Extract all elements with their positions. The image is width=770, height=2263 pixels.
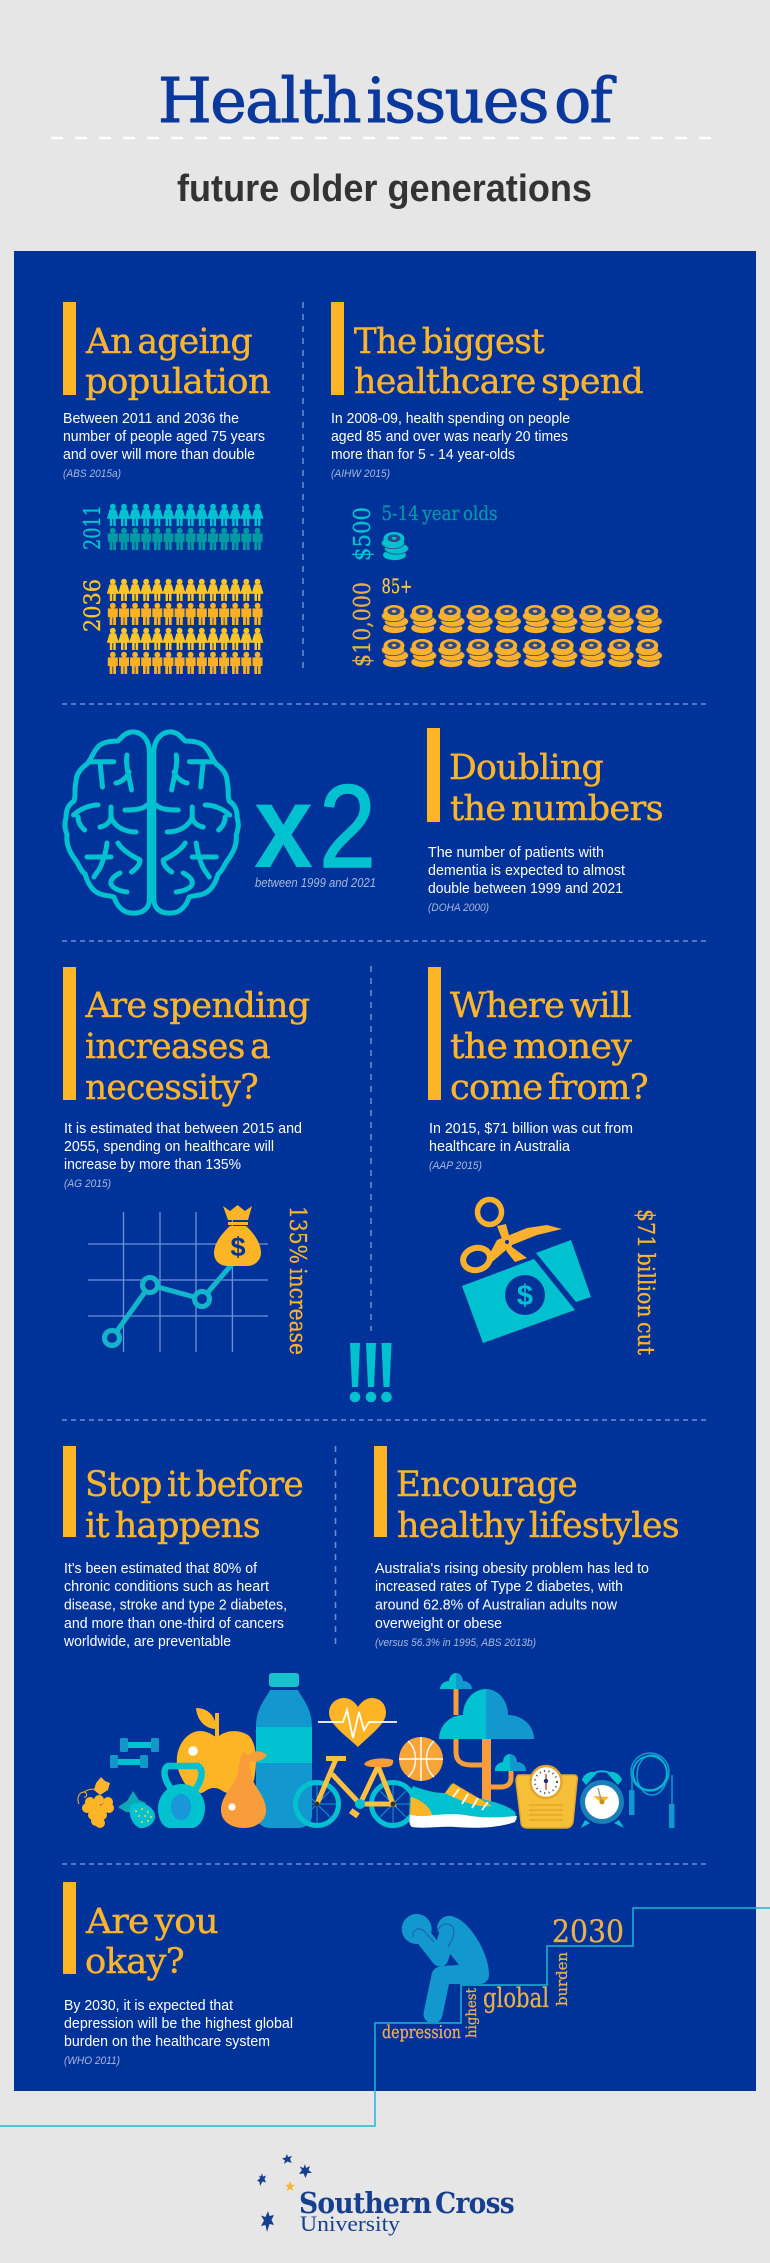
section: are spending increases a necessity <box>63 967 310 1190</box>
section: where will the money come from: the money <box>450 1027 632 1067</box>
stair words: depression <box>382 2022 461 2043</box>
section: encourage healthy lifestyles: (versus 56.3% in 1995, ABS 2013b) <box>375 1637 536 1649</box>
section: stop it before it happens: chronic conditions such as heart <box>64 1579 269 1595</box>
icon: water bottle <box>256 1673 312 1828</box>
section: stop it before it happens: it happens <box>85 1506 260 1546</box>
section: stop it before it happens: disease, stroke and type 2 diabetes, <box>64 1598 287 1614</box>
pictogram: 2011 population <box>81 504 264 550</box>
section: an ageing population: population <box>85 362 270 402</box>
section: stop it before it happens: and more than one-third of cancers <box>64 1616 284 1632</box>
logo: Southern Cross University <box>257 2154 514 2236</box>
stair words: 2030 <box>552 1914 624 1950</box>
section: are spending increases a necessity: increases a <box>85 1027 270 1067</box>
coins: $500 for 5-14 year olds: $500 <box>350 507 376 561</box>
section: an ageing population: An ageing <box>85 322 252 362</box>
section: are spending increases a necessity: It is estimated that between 2015 and <box>64 1121 302 1137</box>
section: encourage healthy lifestyles: Australia's rising obesity problem has led to <box>375 1561 649 1577</box>
section: doubling the numbers: Doubling <box>449 748 603 788</box>
section: are you okay: burden on the healthcare system <box>64 2034 270 2050</box>
icon: heart rate <box>318 1698 397 1747</box>
section: where will the money come from: Where will <box>450 986 631 1026</box>
x2 statistic: 2 <box>319 761 376 893</box>
section: where will the money come from: healthcare in Australia <box>429 1139 571 1155</box>
icon: exclamation marks <box>350 1343 392 1402</box>
pictogram: 2011 population: 2011 <box>81 505 106 550</box>
section: encourage healthy lifestyles: increased rates of Type 2 diabetes, with <box>375 1579 623 1595</box>
section: are spending increases a necessity: necessity? <box>85 1068 258 1108</box>
icon: money bag <box>214 1205 261 1266</box>
section: the biggest healthcare spend: (AIHW 2015) <box>331 468 390 480</box>
section: are you okay: By 2030, it is expected that <box>64 1998 233 2014</box>
section: the biggest healthcare spend <box>331 302 643 480</box>
section: stop it before it happens: worldwide, are preventable <box>63 1634 231 1650</box>
logo: Southern Cross University: Southern Cross <box>299 2186 514 2220</box>
section: stop it before it happens: It's been estimated that 80% of <box>64 1561 258 1577</box>
section: are spending increases a necessity: Are spending <box>84 986 310 1026</box>
pictogram: 2036 population: 2036 <box>81 579 106 632</box>
icon: pear <box>221 1751 267 1828</box>
section: where will the money come from: (AAP 2015) <box>429 1160 482 1172</box>
section: the biggest healthcare spend: The biggest <box>354 322 545 362</box>
icon: weighing scale <box>516 1766 577 1828</box>
coins: $10,000 for 85+: 85+ <box>382 574 412 598</box>
icon: money bag: $ <box>230 1232 246 1262</box>
icon: skipping rope <box>629 1753 674 1828</box>
section: the biggest healthcare spend: aged 85 and over was nearly 20 times <box>331 429 568 445</box>
section: stop it before it happens: Stop it before <box>85 1465 303 1505</box>
stair words <box>382 1914 624 2043</box>
section: are you okay: depression will be the highest global <box>64 2016 293 2032</box>
section: are spending increases a necessity: 2055, spending on healthcare will <box>64 1139 274 1155</box>
stair words: burden <box>553 1952 571 2006</box>
icon: scissors cutting money <box>461 1200 658 1356</box>
icon: kettlebell <box>158 1766 205 1828</box>
section: doubling the numbers <box>427 728 663 914</box>
section: doubling the numbers: the numbers <box>450 789 663 829</box>
logo: Southern Cross University: University <box>300 2211 400 2236</box>
section: doubling the numbers: The number of patients with <box>428 845 604 861</box>
section: stop it before it happens <box>63 1446 303 1650</box>
icon: alarm clock <box>580 1771 624 1828</box>
main blue panel <box>14 251 756 2091</box>
x2 statistic: x <box>254 761 313 893</box>
section: are you okay: Are you <box>85 1902 218 1942</box>
icon: apple <box>177 1708 256 1794</box>
title: Health issues of <box>158 64 617 137</box>
icon: scissors cutting money: $ <box>517 1280 533 1312</box>
chart: 135% increase <box>88 1205 310 1355</box>
icon: bicycle <box>296 1756 414 1826</box>
section: doubling the numbers: double between 1999 and 2021 <box>428 881 623 897</box>
section: an ageing population: Between 2011 and 2036 the <box>63 411 239 427</box>
coins: $500 for 5-14 year olds <box>350 501 498 561</box>
stair line <box>0 1908 770 2126</box>
icon: dumbbells <box>110 1738 159 1768</box>
section: an ageing population: (ABS 2015a) <box>63 468 121 480</box>
icon: trees <box>439 1673 534 1804</box>
icon: scissors cutting money: $71 billion cut <box>632 1209 658 1356</box>
healthy lifestyle illustration <box>78 1673 674 1828</box>
coins: $10,000 for 85+: $10,000 <box>350 582 376 667</box>
coins: $10,000 for 85+ <box>350 574 662 667</box>
section: encourage healthy lifestyles: overweight or obese <box>375 1616 502 1632</box>
section: are you okay: (WHO 2011) <box>64 2055 120 2067</box>
section: doubling the numbers: (DOHA 2000) <box>428 902 489 914</box>
x2 statistic <box>254 761 376 893</box>
section: encourage healthy lifestyles: Encourage <box>396 1465 577 1505</box>
section: encourage healthy lifestyles: around 62.8% of Australian adults now <box>375 1598 618 1614</box>
section: are you okay: okay? <box>85 1942 184 1982</box>
section: are you okay <box>63 1882 293 2067</box>
icon: strawberry <box>118 1791 155 1828</box>
section: encourage healthy lifestyles <box>374 1446 679 1649</box>
section: an ageing population: number of people aged 75 years <box>63 429 265 445</box>
stair words: highest <box>464 1988 480 2038</box>
section: are spending increases a necessity: increase by more than 135% <box>64 1157 241 1173</box>
stair words: global <box>483 1983 549 2014</box>
section: encourage healthy lifestyles: healthy lifestyles <box>397 1506 679 1546</box>
section: where will the money come from: In 2015, $71 billion was cut from <box>429 1121 633 1137</box>
section: the biggest healthcare spend: healthcare spend <box>354 362 643 402</box>
icon: running shoe <box>409 1783 517 1828</box>
section: are spending increases a necessity: (AG 2015) <box>64 1178 111 1190</box>
icon: basketball <box>399 1737 443 1781</box>
coins: $500 for 5-14 year olds: 5-14 year olds <box>382 501 498 525</box>
section: the biggest healthcare spend: In 2008-09, health spending on people <box>331 411 570 427</box>
chart: 135% increase: 135% increase <box>284 1206 310 1355</box>
section: where will the money come from <box>428 967 648 1172</box>
pictogram: 2036 population <box>81 579 264 674</box>
section: doubling the numbers: dementia is expected to almost <box>428 863 625 879</box>
icon: grapes <box>78 1777 114 1828</box>
section: where will the money come from: come from? <box>450 1068 648 1108</box>
icon: sad seated person <box>402 1914 489 2014</box>
icon: brain <box>65 732 238 913</box>
section: an ageing population: and over will more than double <box>63 447 255 463</box>
x2 statistic: between 1999 and 2021 <box>255 875 376 890</box>
section: an ageing population <box>63 302 270 480</box>
section: the biggest healthcare spend: more than for 5 - 14 year-olds <box>331 447 515 463</box>
subtitle: future older generations <box>177 168 592 210</box>
